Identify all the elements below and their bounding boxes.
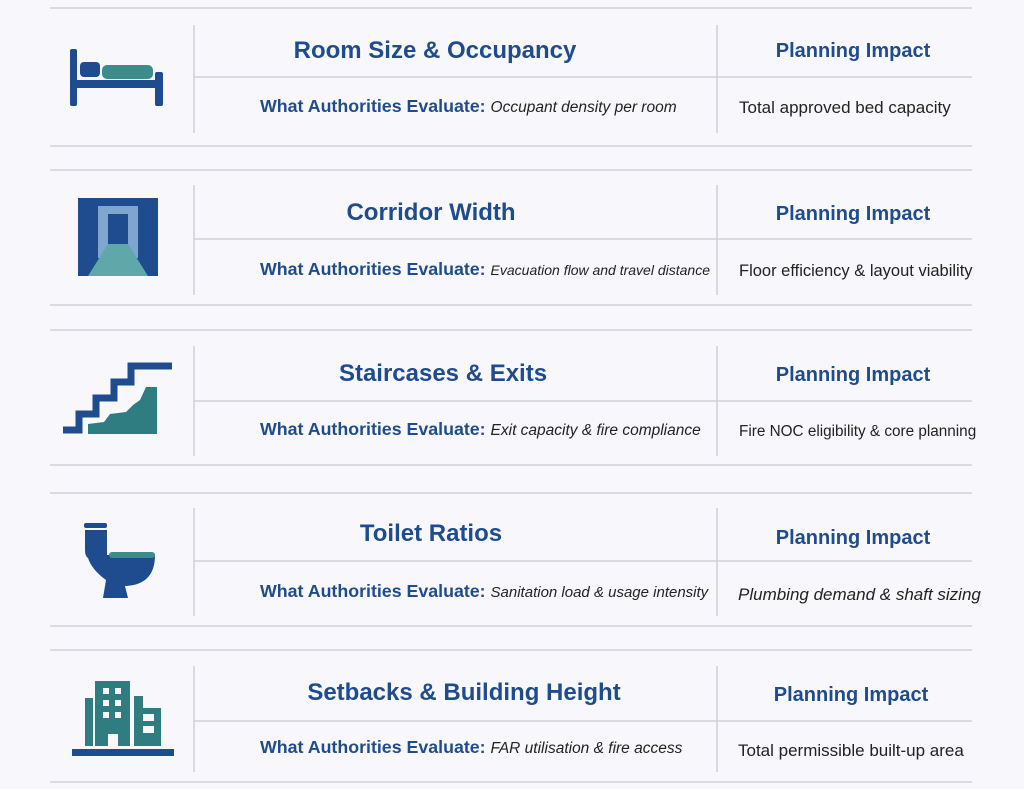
heading: planning impact: Planning Impact	[776, 203, 931, 225]
text: evaluate: What Authorities Evaluate: Evacuation flow and travel distance	[260, 259, 710, 279]
title: Staircases & Exits	[339, 360, 547, 387]
row: setbacks	[72, 679, 964, 760]
text: impact: Floor efficiency & layout viability	[739, 262, 973, 280]
title: Corridor Width	[346, 199, 516, 226]
text: evaluate: What Authorities Evaluate: Occupant density per room	[260, 96, 677, 116]
title: Toilet Ratios	[360, 520, 502, 547]
heading: planning impact: Planning Impact	[776, 364, 931, 386]
icon: toilet	[84, 523, 155, 598]
heading: planning impact: Planning Impact	[776, 40, 931, 62]
row: room size	[70, 37, 951, 117]
heading: planning impact: Planning Impact	[776, 527, 931, 549]
text: impact: Total permissible built-up area	[738, 741, 964, 760]
row: staircases	[63, 360, 976, 440]
text: evaluate: What Authorities Evaluate: Sanitation load & usage intensity	[260, 581, 710, 601]
icon: buildings	[72, 681, 174, 756]
heading: planning impact: Planning Impact	[774, 684, 929, 706]
title: Room Size & Occupancy	[294, 37, 577, 64]
icon: corridor	[78, 198, 158, 276]
row: toilet	[84, 520, 981, 604]
text: impact: Fire NOC eligibility & core planning	[739, 423, 976, 440]
title: Setbacks & Building Height	[307, 679, 621, 706]
row: corridor	[78, 198, 973, 280]
icon: stairs	[63, 366, 172, 434]
text: evaluate: What Authorities Evaluate: FAR utilisation & fire access	[260, 737, 683, 757]
text: impact: Plumbing demand & shaft sizing	[738, 585, 981, 604]
text: impact: Total approved bed capacity	[739, 98, 951, 117]
icon: bed	[70, 49, 163, 106]
text: evaluate: What Authorities Evaluate: Exit capacity & fire compliance	[260, 419, 701, 439]
